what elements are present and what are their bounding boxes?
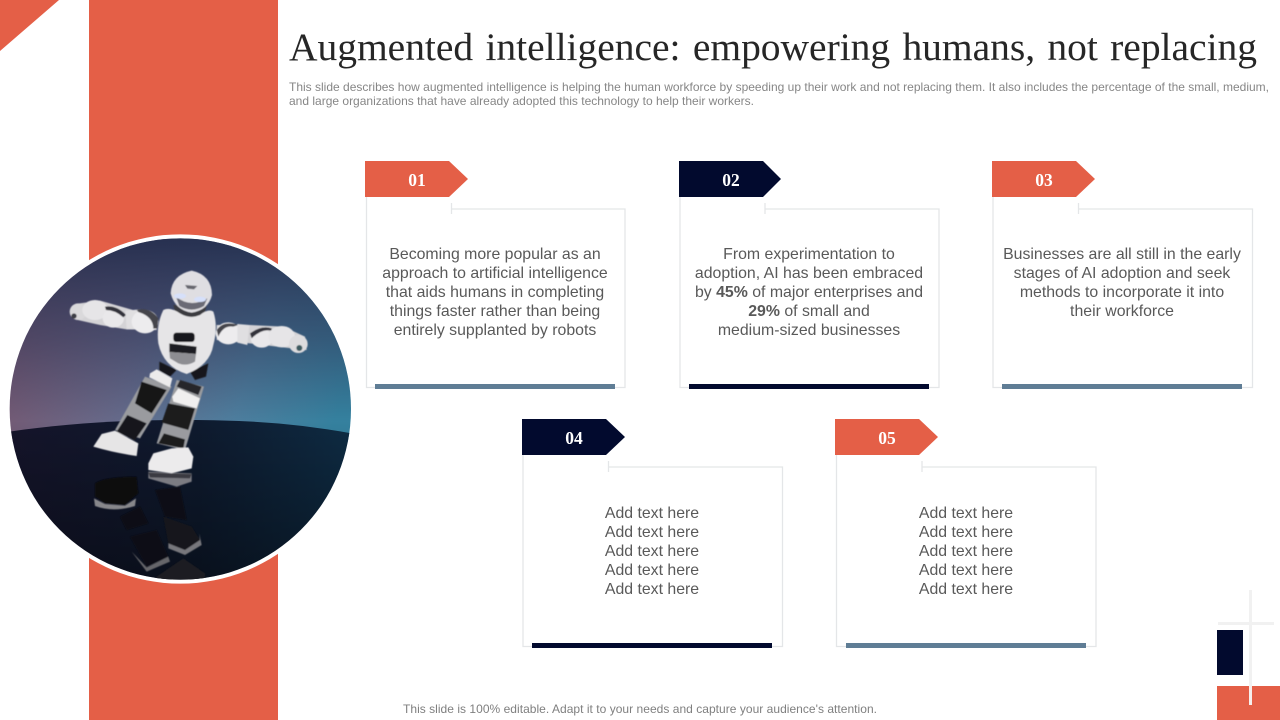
knee pads [149,369,172,387]
photo: robot in circle [6,234,355,584]
card 04 tag [522,419,625,455]
card 01 bottom bar [375,384,615,389]
card 02 [679,161,939,389]
background band [89,0,278,720]
card 04 text: Add text here [605,505,699,522]
card 05 tag [835,419,938,455]
card 05 text: Add text here [919,562,1013,579]
card 02 tag [679,161,781,197]
description text: This slide describes how augmented intelligence is helping the human workforce by speeding up their work and not replacing them. It also includes the percentage of the small, medium, [289,80,1269,94]
card 05 number: 05 [878,428,896,448]
title: Augmented intelligence: empowering humans, not replacing [289,25,1257,69]
card 04 text: Add text here [605,543,699,560]
card 02 text: medium-sized businesses [718,322,900,339]
feet [93,431,138,456]
card 02 text: From experimentation to [723,246,895,263]
card 03 text: Businesses are all still in the early [1003,246,1241,263]
head [171,271,212,313]
card 04 text: Add text here [605,562,699,579]
card 03 bottom bar [1002,384,1242,389]
card 04 frame [523,455,782,646]
card 02 bottom bar [689,384,929,389]
card 03 [992,161,1252,389]
card 04 [522,419,782,648]
card 01 text: things faster rather than being [390,303,600,320]
card 01 tag [365,161,468,197]
card 03 text: stages of AI adoption and seek [1014,265,1230,282]
card 02 text: by 45% of major enterprises and [695,284,923,301]
card 04 text: Add text here [605,581,699,598]
card 04 bottom bar [532,643,772,648]
robot reflection [94,472,205,583]
card 02 text: adoption, AI has been embraced [695,265,923,282]
card 05 text: Add text here [919,581,1013,598]
card 02 text: 29% of small and [748,303,870,320]
card 05 frame [836,455,1096,646]
card 01 text: entirely supplanted by robots [394,322,596,339]
corner decoration [1217,590,1280,720]
neck [173,305,207,319]
card 05 [835,419,1096,648]
card 01 text: Becoming more popular as an [389,246,601,263]
robot body [70,271,308,473]
torso [158,309,216,374]
left leg [115,377,172,438]
card 03 text: their workforce [1070,303,1174,320]
card 05 text: Add text here [919,524,1013,541]
card 03 number: 03 [1035,170,1053,190]
card 01 text: approach to artificial intelligence [382,265,608,282]
card 03 frame [993,197,1252,388]
card 05 bottom bar [846,643,1086,648]
photo backdrop [7,235,355,583]
description text [289,80,1269,108]
corner triangle [0,0,59,51]
hips [159,362,177,377]
card 01 frame [366,197,625,388]
card 04 text: Add text here [605,524,699,541]
card 05 text: Add text here [919,543,1013,560]
card 03 tag [992,161,1095,197]
right leg [157,380,204,450]
card 01 [365,161,625,389]
card 01 text: that aids humans in completing [386,284,604,301]
card 02 number: 02 [722,170,740,190]
footer note: This slide is 100% editable. Adapt it to your needs and capture your audience's attention. [403,702,877,716]
description text: and large organizations that have already adopted this technology to help their workers. [289,94,754,108]
card 05 text: Add text here [919,505,1013,522]
card 04 number: 04 [565,428,583,448]
card 01 number: 01 [408,170,426,190]
card 03 text: methods to incorporate it into [1020,284,1224,301]
right arm [217,325,307,350]
left arm [75,301,157,330]
card 02 frame [680,197,939,388]
